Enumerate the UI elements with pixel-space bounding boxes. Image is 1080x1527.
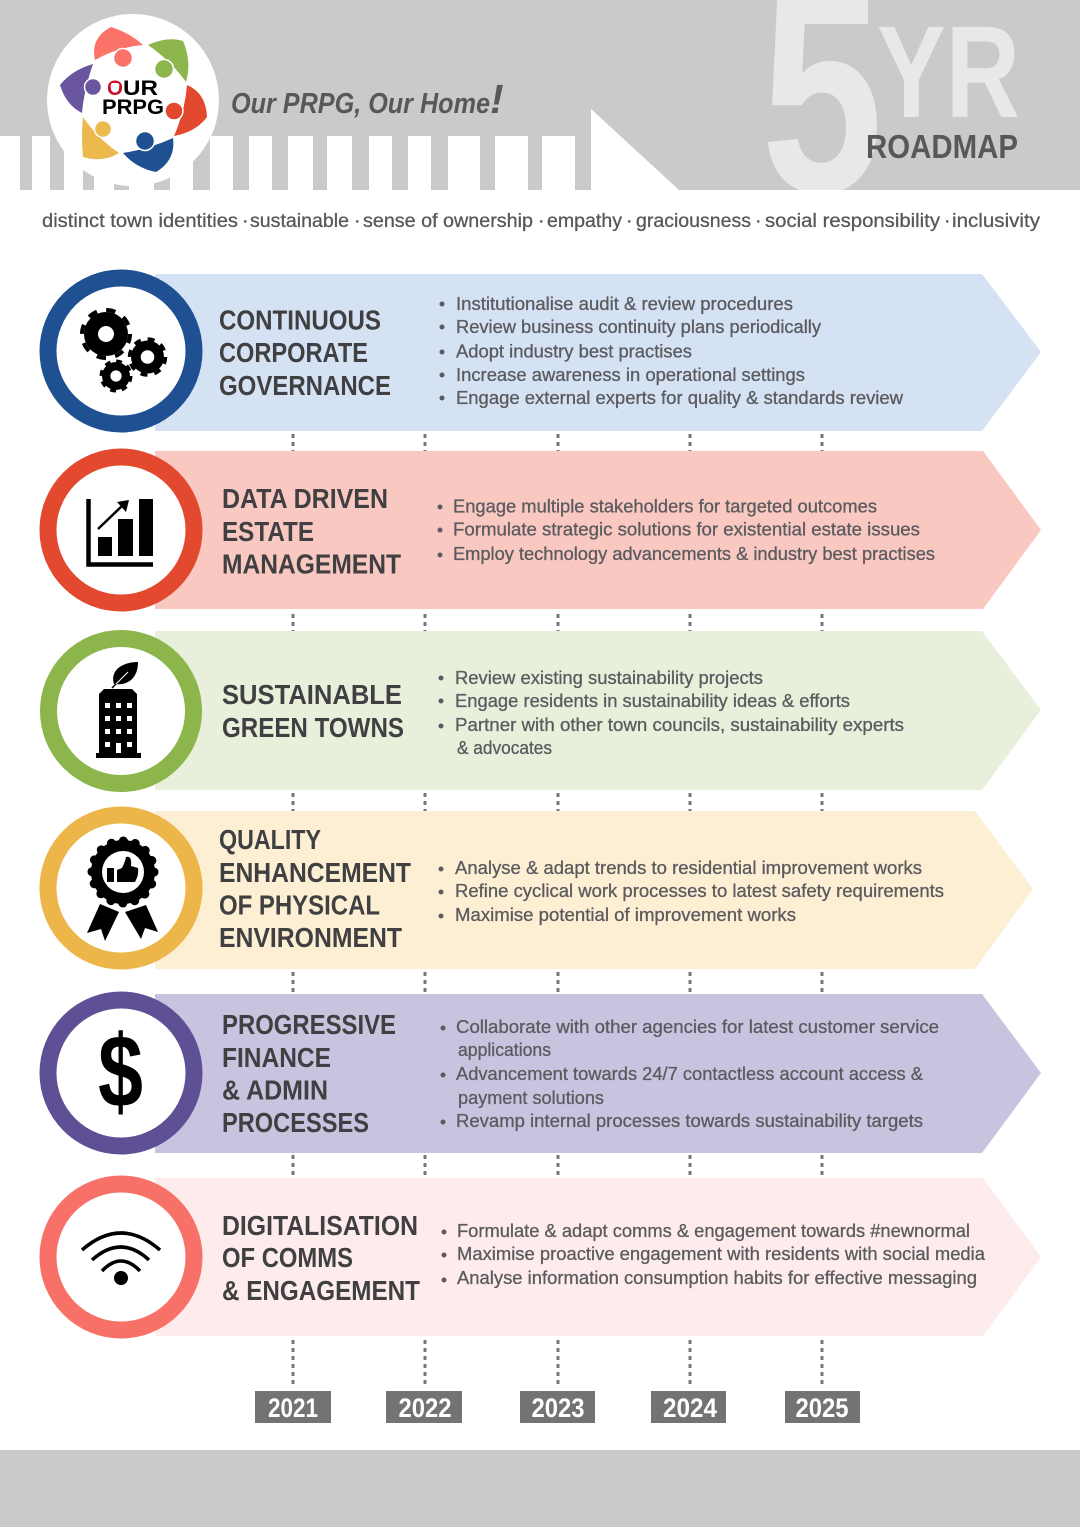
heading: DIGITALISATION [222, 1210, 418, 1241]
bullet list: Formulate & adapt comms & engagement towards #newnormal [457, 1221, 970, 1241]
bullet list: & advocates [457, 738, 552, 758]
arrow band [155, 1178, 1041, 1336]
bullet list: Employ technology advancements & industry best practises [453, 544, 935, 564]
bullet list [438, 668, 904, 758]
logo figure: red [165, 85, 207, 136]
bullet list: Revamp internal processes towards sustainability targets [456, 1111, 923, 1131]
header banner [0, 0, 1080, 190]
icon ring [48, 1184, 194, 1330]
heading: ESTATE [222, 516, 314, 547]
bullet list: Analyse & adapt trends to residential improvement works [455, 858, 922, 878]
heading: PROCESSES [222, 1107, 369, 1138]
year labels [255, 1391, 860, 1423]
icon: gears [82, 310, 166, 391]
icon: award badge [87, 840, 158, 941]
tagline: ! [490, 76, 504, 122]
panel: continuous corporate governance [48, 274, 1041, 431]
timeline dotted connectors [293, 434, 822, 1384]
icon: dollar sign: $ [98, 1014, 143, 1129]
heading: CORPORATE [219, 337, 368, 368]
bullet list: Formulate strategic solutions for existential estate issues [453, 520, 920, 540]
heading: ENHANCEMENT [219, 857, 411, 888]
logo figure: blue [123, 132, 173, 172]
heading [219, 824, 411, 953]
heading [222, 483, 401, 580]
logo wordmark: O [107, 77, 123, 100]
tagline [231, 76, 504, 122]
values line: empathy [547, 210, 622, 232]
arrow band [155, 631, 1041, 790]
logo wordmark: PRPG [102, 96, 164, 119]
panel: digitalisation of comms and engagement [48, 1178, 1041, 1336]
bullet list: Collaborate with other agencies for latest customer service [456, 1017, 939, 1037]
arrow band [155, 811, 1033, 969]
values line [42, 210, 1040, 232]
values line: · [755, 210, 762, 232]
bullet list [438, 858, 944, 925]
year 2021: 2021 [268, 1393, 318, 1423]
values line: graciousness [636, 210, 751, 232]
white triangle [591, 109, 679, 190]
year 2024: 2024 [663, 1393, 717, 1423]
bullet list [440, 294, 904, 408]
panel: quality enhancement of physical environment [48, 811, 1033, 969]
icon ring [48, 457, 194, 603]
heading: FINANCE [222, 1042, 331, 1073]
bullet list [440, 1017, 939, 1131]
panel: progressive finance and admin processes [48, 994, 1041, 1153]
heading: OF COMMS [222, 1242, 353, 1273]
heading: GREEN TOWNS [222, 712, 404, 743]
heading [222, 1210, 420, 1306]
logo heart [111, 83, 119, 92]
values line: · [354, 210, 360, 232]
icon: green building [96, 662, 141, 758]
logo figure: purple [60, 64, 102, 113]
icon ring [48, 278, 194, 424]
arrow band [155, 274, 1041, 431]
heading [222, 679, 404, 743]
logo wordmark [102, 77, 164, 119]
year 2025: 2025 [796, 1393, 848, 1423]
icon: bar chart [88, 499, 153, 564]
bullet list: Adopt industry best practises [456, 342, 692, 362]
bullet list: Engage multiple stakeholders for targeted outcomes [453, 496, 877, 516]
bullet list: Partner with other town councils, sustainability experts [455, 715, 904, 735]
bullet list: Maximise potential of improvement works [455, 905, 796, 925]
values line: · [538, 210, 544, 232]
bullet list [438, 496, 935, 564]
values line: social responsibility [765, 210, 940, 232]
bullet list: Engage external experts for quality & standards review [456, 388, 904, 408]
heading: CONTINUOUS [219, 304, 381, 336]
icon ring [48, 638, 194, 784]
logo wordmark: UR [123, 77, 158, 100]
icon ring [48, 1000, 194, 1146]
values line: distinct town identities [42, 210, 238, 232]
heading: PROGRESSIVE [222, 1009, 396, 1040]
bullet list: Review business continuity plans periodically [456, 317, 821, 337]
logo figure: yellow [82, 117, 119, 159]
footer band [0, 1450, 1080, 1527]
values line: sense of ownership [363, 210, 533, 232]
heading: OF PHYSICAL [219, 890, 380, 920]
heading: & ENGAGEMENT [222, 1275, 420, 1306]
values line: · [626, 210, 632, 232]
heading: DATA DRIVEN [222, 483, 388, 514]
bullet list: Analyse information consumption habits for effective messaging [457, 1268, 977, 1288]
crossing stripes [0, 136, 575, 190]
logo figure: green [148, 39, 188, 82]
bullet list: applications [458, 1040, 551, 1060]
YR heading: YR [877, 0, 1020, 145]
bullet list [442, 1221, 986, 1288]
arrow band [155, 451, 1041, 609]
ROADMAP heading: ROADMAP [866, 128, 1018, 165]
heading: SUSTAINABLE [222, 679, 402, 710]
tagline: Our PRPG, Our Home [231, 88, 490, 120]
logo figure: coral [94, 27, 143, 68]
heading: & ADMIN [222, 1074, 328, 1106]
bullet list: payment solutions [458, 1088, 604, 1108]
heading: QUALITY [219, 824, 321, 855]
bullet list: Refine cyclical work processes to latest safety requirements [455, 881, 944, 901]
bullet list: Engage residents in sustainability ideas & efforts [455, 691, 850, 711]
values line: · [944, 210, 950, 232]
values line: · [242, 210, 248, 232]
bullet list: Maximise proactive engagement with residents with social media [457, 1244, 986, 1264]
year 2022: 2022 [398, 1393, 452, 1423]
heading: ENVIRONMENT [219, 922, 402, 953]
heading [219, 304, 391, 401]
bullet list: Increase awareness in operational settings [456, 365, 805, 385]
icon: wifi [82, 1233, 160, 1285]
heading: GOVERNANCE [219, 370, 391, 401]
bullet list: Institutionalise audit & review procedures [456, 294, 793, 314]
panel: data driven estate management [48, 451, 1041, 609]
panel: sustainable green towns [48, 631, 1041, 790]
values line: sustainable [250, 210, 349, 232]
arrow band [155, 994, 1041, 1153]
heading: MANAGEMENT [222, 548, 401, 580]
heading [222, 1009, 396, 1138]
icon ring [48, 815, 194, 961]
logo [47, 14, 219, 186]
year 2023: 2023 [532, 1393, 584, 1423]
bullet list: Advancement towards 24/7 contactless account access & [456, 1064, 923, 1084]
bullet list: Review existing sustainability projects [455, 668, 763, 688]
values line: inclusivity [952, 210, 1040, 232]
